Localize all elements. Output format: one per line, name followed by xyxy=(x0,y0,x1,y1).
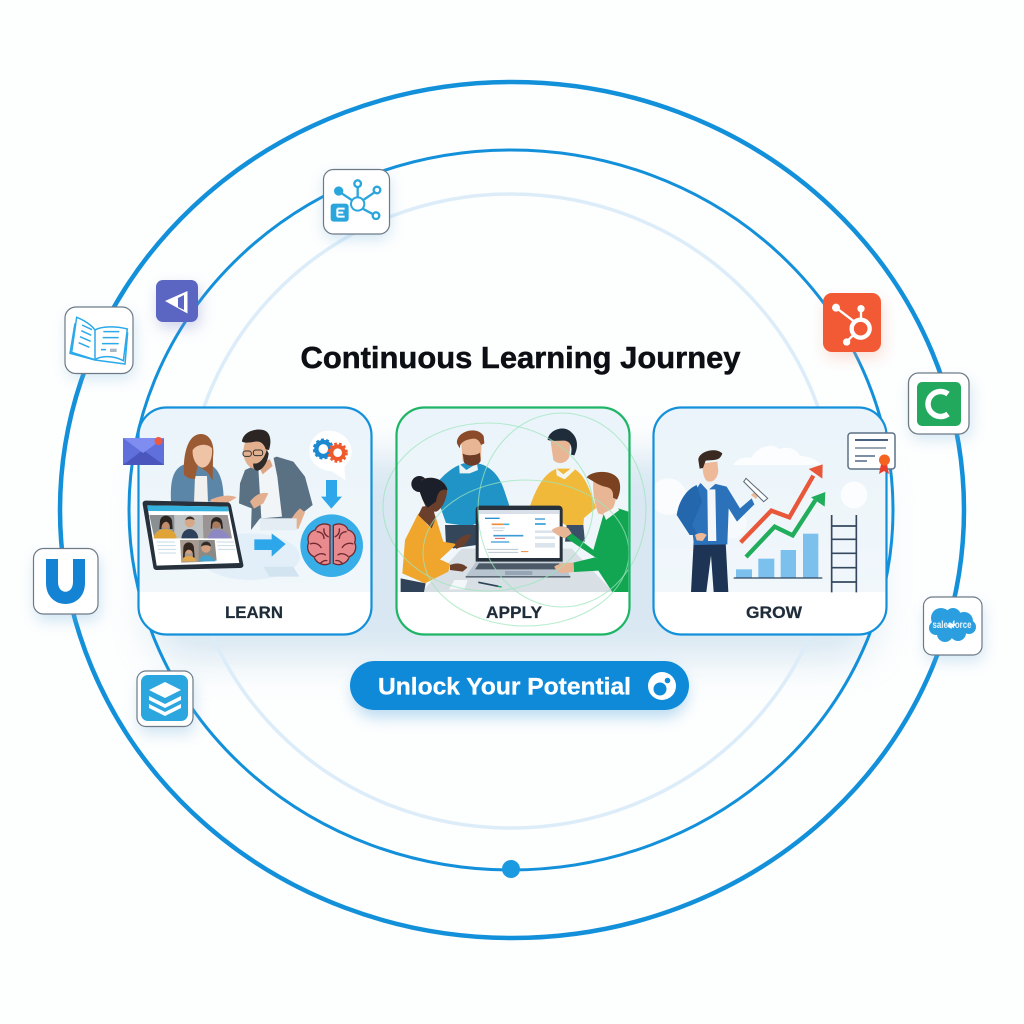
pill icon xyxy=(648,672,676,700)
green arrow xyxy=(746,492,825,557)
woman xyxy=(171,434,237,503)
icon: HubSpot-style tile xyxy=(823,293,883,358)
panel: APPLY xyxy=(383,407,646,635)
laptop xyxy=(466,506,570,578)
illustration: grow scene xyxy=(650,446,867,592)
bar chart xyxy=(736,534,818,578)
brain xyxy=(300,514,363,577)
icon: open book xyxy=(65,307,135,379)
icon: purple arrow tile xyxy=(156,280,200,328)
icon: certificate xyxy=(848,433,895,474)
orbit marker dot xyxy=(502,860,520,878)
illustration: apply scene xyxy=(401,428,628,592)
icon: network xyxy=(324,170,390,239)
red arrow xyxy=(741,464,823,542)
arrow right xyxy=(254,533,286,557)
soft glow behind cards xyxy=(150,455,875,660)
pill text: Unlock Your Potential xyxy=(378,674,631,700)
decorative: green overlay loops xyxy=(383,413,646,626)
man green sweater xyxy=(567,472,628,592)
arrow down xyxy=(321,480,342,509)
green man's hands xyxy=(552,526,574,573)
inner faint orbit ring xyxy=(186,194,836,828)
icon: U tile xyxy=(34,548,100,621)
icon: envelope xyxy=(123,437,164,465)
outer orbit ring xyxy=(60,82,964,938)
woman yellow sweater standing xyxy=(530,428,596,542)
illustration: learn scene xyxy=(143,430,363,580)
label: LEARN: LEARN xyxy=(225,603,283,622)
cloud and faint shapes xyxy=(650,446,867,538)
panel: GROW xyxy=(650,407,887,635)
call-to-action pill xyxy=(350,661,689,718)
label: GROW: GROW xyxy=(746,603,803,622)
title: Continuous Learning Journey xyxy=(300,340,741,375)
man with scroll xyxy=(677,450,768,592)
man xyxy=(239,430,313,530)
icon: green C tile xyxy=(908,373,972,440)
middle orbit ring xyxy=(129,150,893,870)
man with beard, blue sweater xyxy=(433,430,509,548)
salesforce wordmark: salesforce xyxy=(932,619,972,631)
ladder xyxy=(832,515,856,592)
icon: Salesforce tile xyxy=(924,597,984,662)
tablet xyxy=(143,501,243,570)
speech bubble gears xyxy=(309,431,352,480)
panel: LEARN xyxy=(138,407,372,635)
woman orange sweater seated xyxy=(401,476,472,592)
icon: layered stack tile xyxy=(137,671,195,734)
label: APPLY: APPLY xyxy=(486,603,543,622)
